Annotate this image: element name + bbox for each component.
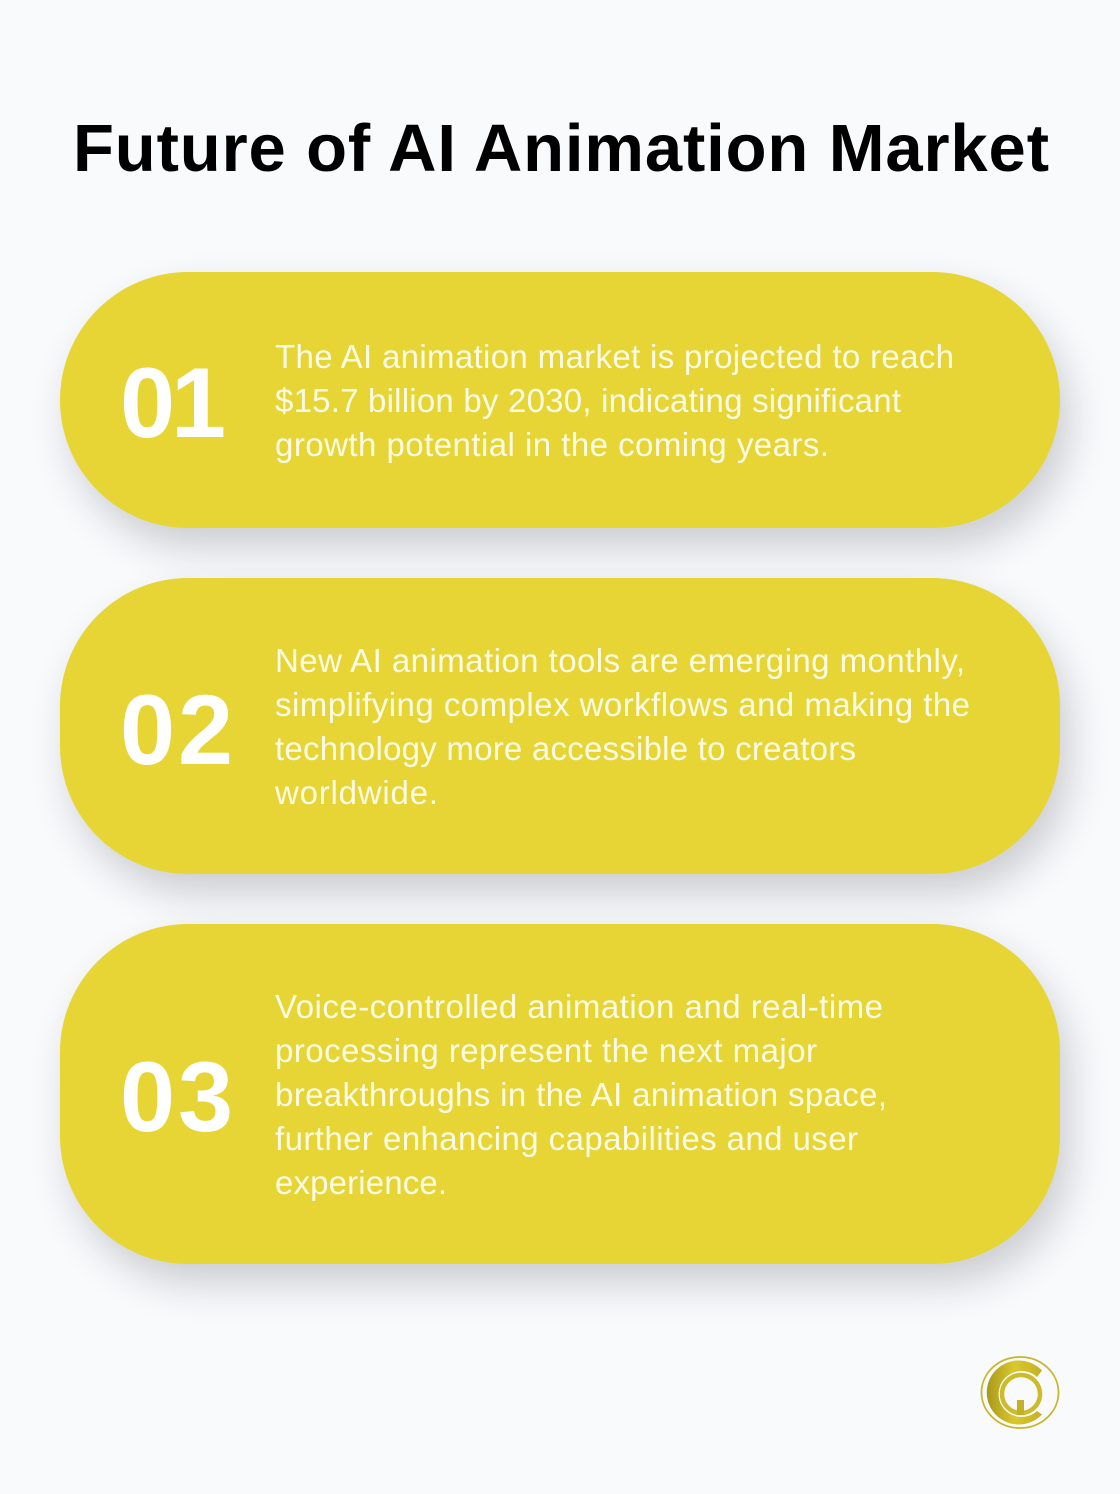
panel: card 02 background xyxy=(60,578,1060,874)
text block 01: $15.7 billion by 2030, indicating significant xyxy=(275,382,901,419)
text block 03: processing represent the next major xyxy=(275,1032,817,1069)
text block 02: simplifying complex workflows and making the xyxy=(275,686,970,723)
number 03: 03 xyxy=(120,1041,233,1152)
text block 03 xyxy=(275,988,887,1201)
text block 03: breakthroughs in the AI animation space, xyxy=(275,1076,887,1113)
text block 03: further enhancing capabilities and user xyxy=(275,1120,858,1157)
title: Future of AI Animation Market xyxy=(73,111,1049,186)
text block 02: worldwide. xyxy=(274,774,438,811)
text block 03: experience. xyxy=(275,1164,447,1201)
number 02: 02 xyxy=(120,674,233,785)
panel: card 03 background xyxy=(60,924,1060,1264)
text block 01: The AI animation market is projected to reach xyxy=(275,338,954,375)
panel: card 01 background xyxy=(60,272,1060,528)
text block 01: growth potential in the coming years. xyxy=(275,426,829,463)
text block 02: New AI animation tools are emerging monthly, xyxy=(275,642,965,679)
card 02 content xyxy=(120,642,970,811)
text block 02 xyxy=(274,642,970,811)
number 01: 01 xyxy=(120,347,226,458)
text block 03: Voice-controlled animation and real-time xyxy=(275,988,883,1025)
text block 01 xyxy=(275,338,954,463)
card 03 content xyxy=(120,988,887,1201)
card 01 content xyxy=(120,338,954,463)
text block 02: technology more accessible to creators xyxy=(275,730,856,767)
icon: gold CQ logo xyxy=(982,1357,1058,1428)
